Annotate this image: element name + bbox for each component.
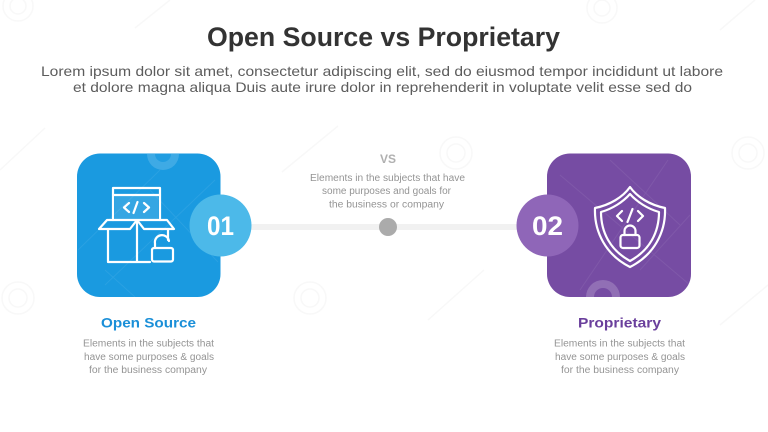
description: open source: Elements in the subjects that — [83, 338, 214, 350]
icon: shield with code and padlock — [595, 187, 665, 267]
icon: open box with code window and padlock — [99, 188, 174, 262]
center description: the business or company — [329, 200, 444, 210]
label: proprietary: Proprietary — [578, 314, 661, 330]
number badge 02 — [516, 194, 578, 256]
number badge 01 — [190, 194, 252, 256]
label: open source: Open Source — [101, 314, 196, 330]
center description: Elements in the subjects that have — [310, 173, 465, 184]
number badge 01: 01 — [207, 211, 234, 241]
center description: some purposes and goals for — [322, 186, 452, 197]
center description — [310, 173, 465, 210]
description: open source: have some purposes & goals — [84, 352, 214, 363]
blue rounded square — [77, 154, 220, 297]
purple rounded square — [547, 154, 691, 297]
description: proprietary — [554, 338, 685, 376]
description: open source: for the business company — [89, 365, 207, 376]
subtitle text: et dolore magna aliqua Duis aute irure dolor in reprehenderit in voluptate velit esse sed do — [73, 79, 692, 95]
panel: proprietary — [516, 154, 691, 297]
subtitle text: Lorem ipsum dolor sit amet, consectetur adipiscing elit, sed do eiusmod tempor incididunt ut labore — [41, 63, 723, 79]
description: open source — [83, 338, 214, 376]
number badge 02: 02 — [532, 211, 563, 241]
description: proprietary: Elements in the subjects that — [554, 338, 685, 350]
description: proprietary: for the business company — [561, 365, 679, 376]
center dot — [379, 218, 397, 236]
title: Open Source vs Proprietary — [207, 22, 560, 52]
vs heading: VS — [380, 152, 396, 166]
description: proprietary: have some purposes & goals — [555, 352, 685, 363]
panel: open source — [77, 154, 252, 297]
subtitle text — [41, 63, 723, 95]
connector line — [245, 224, 525, 230]
